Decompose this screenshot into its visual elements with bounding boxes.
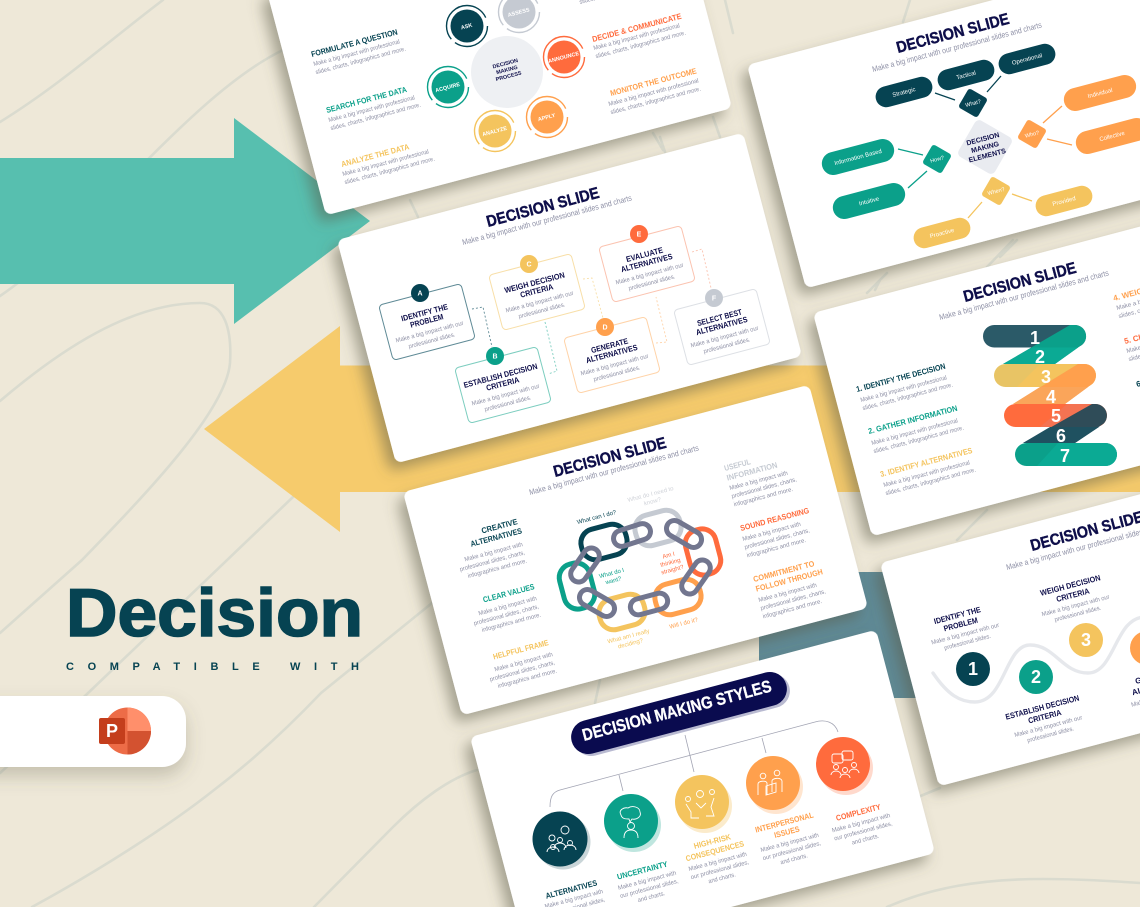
text: decide and communicate: Make a big impact with professional xyxy=(593,22,681,52)
diamond: what: What? xyxy=(965,99,982,109)
icon: PowerPoint logo: P xyxy=(106,721,118,741)
pill: information based xyxy=(819,136,897,178)
text: commitment to follow through: Make a big impact with xyxy=(758,582,818,604)
text: helpful frame xyxy=(487,638,558,691)
chain labels: What am I really xyxy=(607,629,650,645)
text: weigh decision criteria xyxy=(1035,572,1113,626)
diamond: decision making elements: DECISION xyxy=(966,132,1000,147)
text: interpersonal issues: ISSUES xyxy=(773,824,801,840)
icon circle: complexity xyxy=(816,737,873,795)
text: gather information: slides, charts, infographics and more. xyxy=(873,425,965,455)
node: assess: ASSESS xyxy=(507,7,531,19)
panel: decision making process slide xyxy=(267,0,732,215)
node: acquire xyxy=(428,66,468,108)
title: DECISION SLIDE xyxy=(552,435,668,481)
text: formulate a question: FORMULATE A QUESTION xyxy=(310,27,399,59)
box C: weigh decision criteria: WEIGH DECISION xyxy=(503,270,566,295)
text: identify the problem: professional slides. xyxy=(943,633,992,652)
text: sound reasoning: professional slides, charts, xyxy=(744,527,811,551)
text: identify the decision: 1. IDENTIFY THE DECISION xyxy=(855,362,947,394)
text: interpersonal issues: Make a big impact with xyxy=(760,832,820,854)
subtitle: Make a big impact with our professional slides and charts xyxy=(528,444,700,497)
diamond: decision making elements: ELEMENTS xyxy=(968,148,1007,164)
box B: establish decision criteria xyxy=(455,347,551,423)
text: weigh decision criteria: Make a big impact with our xyxy=(1041,594,1110,618)
badge F: F xyxy=(712,296,717,302)
center circle: PROCESS xyxy=(495,70,523,83)
box F: select best alternatives: SELECT BEST xyxy=(696,308,743,328)
text: interpersonal issues: INTERPERSONAL xyxy=(754,811,815,835)
connectors xyxy=(898,76,1072,218)
arrow: teal pointing right xyxy=(0,118,370,324)
zigzag numbered stack: 3 xyxy=(1041,367,1051,387)
text: generate alternatives xyxy=(1125,663,1140,709)
zigzag numbered stack: 5 xyxy=(1051,406,1061,426)
text: clear values: Make a big impact with xyxy=(478,595,538,617)
pill: operational: Operational xyxy=(1011,53,1043,67)
icon circle: uncertainty xyxy=(604,794,661,852)
text: complexity: our professional slides, xyxy=(833,820,893,842)
text: uncertainty: and charts. xyxy=(637,890,666,904)
text: identify the decision: slides, charts, infographics and more. xyxy=(862,382,954,412)
box F: select best alternatives: professional slides. xyxy=(703,336,751,355)
diamond: how: How? xyxy=(930,155,945,165)
text: useful information: professional slides, charts, xyxy=(731,476,798,500)
node: ask xyxy=(446,6,488,46)
text: complexity xyxy=(828,800,896,851)
step 4 xyxy=(1130,631,1140,665)
badge B xyxy=(486,347,504,365)
title pill: DECISION MAKING STYLES xyxy=(580,677,774,745)
center circle: DECISION xyxy=(492,58,519,70)
box E: evaluate alternatives: EVALUATE xyxy=(625,245,665,264)
text: clear values: infographics and more. xyxy=(481,612,542,634)
text: clear values xyxy=(471,582,542,635)
text: creative alternatives: infographics and more. xyxy=(467,558,528,580)
text: alternatives: ALTERNATIVES xyxy=(545,878,599,901)
step 1 xyxy=(956,652,990,686)
text: formulate a question: slides, charts, infographics and more. xyxy=(315,46,407,76)
panel: numbered list slide xyxy=(813,206,1140,536)
text: clear values: professional slides, charts, xyxy=(473,603,540,627)
pill: information based: Information Based xyxy=(834,149,883,167)
text: useful information xyxy=(723,451,800,508)
box C: weigh decision criteria: Make a big impact with our xyxy=(505,290,574,314)
chain labels: Will I do it? xyxy=(669,617,699,631)
text: choose xyxy=(1123,322,1140,363)
text: weigh decision criteria: professional slides. xyxy=(1054,605,1102,624)
text: commitment to follow through xyxy=(752,558,829,620)
pill: proactive: Proactive xyxy=(929,228,956,240)
node: analyze xyxy=(474,110,516,152)
diamond: when yellow: When? xyxy=(987,187,1005,197)
zigzag numbered stack xyxy=(983,325,1117,466)
box F: select best alternatives: Make a big impact with our xyxy=(690,325,759,349)
text: high-risk consequences: our professional slides, xyxy=(690,859,750,881)
diamond: when yellow xyxy=(981,176,1011,206)
text: search for the data: SEARCH FOR THE DATA xyxy=(325,85,408,115)
text: sound reasoning xyxy=(739,506,813,559)
box A: identify the problem: PROBLEM xyxy=(409,312,445,330)
text: sound reasoning: Make a big impact with xyxy=(742,521,802,543)
pill: tactical xyxy=(935,57,997,93)
text: weigh decision criteria: CRITERIA xyxy=(1055,587,1091,604)
box B: establish decision criteria: Make a big impact with our xyxy=(471,383,540,407)
arrow: yellow pointing left xyxy=(204,326,1140,532)
text: complexity: COMPLEXITY xyxy=(835,802,882,823)
step 2 xyxy=(1019,660,1053,694)
text: helpful frame: Make a big impact with xyxy=(494,651,554,673)
text: commitment to follow through: professional slides, charts, xyxy=(760,588,827,612)
text: interpersonal issues: our professional slides, xyxy=(762,840,822,862)
pill: provided xyxy=(1033,183,1095,219)
box D: generate alternatives: ALTERNATIVES xyxy=(585,343,639,365)
band: muted teal arrow body xyxy=(759,572,1140,698)
title: DECISION SLIDE xyxy=(485,185,601,231)
pill: individual: Individual xyxy=(1087,88,1113,100)
center circle: MAKING xyxy=(496,65,518,76)
diamond: how xyxy=(922,144,952,174)
pill: operational xyxy=(996,41,1058,77)
icon circle: high-risk consequences xyxy=(675,775,732,833)
text: identify alternatives: slides, charts, infographics and more. xyxy=(885,467,977,497)
text: identify the decision xyxy=(855,362,954,412)
text: analyze the data: ANALYZE THE DATA xyxy=(340,142,410,169)
text: uncertainty xyxy=(614,858,682,907)
badge A xyxy=(411,284,429,302)
title: DECISION SLIDE xyxy=(895,11,1011,57)
text: helpful frame: infographics and more. xyxy=(497,668,558,690)
badge D: D xyxy=(602,324,608,332)
text: high-risk consequences: HIGH-RISK xyxy=(693,832,732,851)
box E: evaluate alternatives: ALTERNATIVES xyxy=(620,252,674,274)
text: creative alternatives xyxy=(457,517,528,581)
chain labels: know? xyxy=(644,497,662,507)
box A: identify the problem: Make a big impact with our xyxy=(395,320,464,344)
text: gather information: Make a big impact with professional xyxy=(871,417,959,447)
text: weigh decision criteria: WEIGH DECISION xyxy=(1039,573,1102,598)
badge C xyxy=(520,255,538,273)
title: DECISION SLIDE xyxy=(962,260,1078,306)
node: ask: ASK xyxy=(460,23,473,31)
box B: establish decision criteria: ESTABLISH DECISION xyxy=(463,362,539,390)
text: uncertainty: Make a big impact with xyxy=(617,870,678,892)
badge B: B xyxy=(492,354,498,360)
chain labels: What do I need to xyxy=(627,486,675,504)
diamond: decision making elements: MAKING xyxy=(971,141,1000,155)
pill: strategic xyxy=(873,74,935,110)
text: identify alternatives: Make a big impact with professional xyxy=(883,459,971,489)
text: analyze the data: Make a big impact with professional xyxy=(342,148,430,178)
text: interpersonal issues xyxy=(754,810,824,870)
pill: strategic: Strategic xyxy=(892,87,916,99)
chain diagram xyxy=(556,507,724,633)
text: decide and communicate xyxy=(591,12,687,60)
zigzag numbered stack: 7 xyxy=(1060,446,1070,466)
step 2: 2 xyxy=(1031,667,1041,687)
text: gather information xyxy=(867,404,965,455)
text: identify the problem: Make a big impact with our xyxy=(931,622,1000,646)
text: uncertainty: UNCERTAINTY xyxy=(616,859,669,882)
subtitle: Make a big impact with our professional slides and charts xyxy=(461,194,633,247)
text: high-risk consequences xyxy=(682,829,753,889)
text: search for the data: Make a big impact with professional xyxy=(328,94,416,124)
box C: weigh decision criteria: professional slides. xyxy=(518,301,566,320)
text: high-risk consequences: CONSEQUENCES xyxy=(685,839,746,863)
panel: decision elements slide xyxy=(747,0,1140,288)
diamond: decision making elements xyxy=(956,118,1014,176)
tree connector xyxy=(550,721,838,807)
text: establish decision criteria: ESTABLISH DECISION xyxy=(1004,693,1080,722)
text: interpersonal issues: and charts. xyxy=(780,852,809,866)
text: monitor the outcome: Make a big impact with professional xyxy=(608,77,699,108)
pill: intuitive: Intuitive xyxy=(858,196,881,208)
text: creative alternatives: CREATIVE xyxy=(480,517,519,535)
panel: decision flow boxes slide xyxy=(337,133,802,463)
chain labels: thinking xyxy=(660,558,681,569)
text: uncertainty: our professional slides, xyxy=(619,878,679,900)
center circle xyxy=(471,36,543,108)
node: apply: APPLY xyxy=(537,113,556,123)
node: apply xyxy=(526,96,568,138)
box C: weigh decision criteria xyxy=(489,254,585,330)
chain labels: deciding? xyxy=(617,638,644,650)
text: identify the problem: PROBLEM xyxy=(943,616,979,633)
box B: establish decision criteria: professional slides. xyxy=(484,394,532,413)
pill: individual xyxy=(1061,72,1139,114)
text: identify the problem xyxy=(925,602,1002,655)
text: creative alternatives: ALTERNATIVES xyxy=(469,526,524,549)
box A: identify the problem: IDENTIFY THE xyxy=(400,302,449,323)
badge C: C xyxy=(526,262,532,268)
text: analyze the data: slides, charts, infographics and more. xyxy=(344,156,436,186)
zigzag numbered stack: 4 xyxy=(1046,387,1056,407)
text: helpful frame: HELPFUL FRAME xyxy=(492,638,550,661)
text: creative alternatives: Make a big impact with xyxy=(464,541,524,563)
text: establish decision criteria xyxy=(1004,693,1087,748)
chain labels: Am I xyxy=(662,551,676,561)
node: announce: ANNOUNCE xyxy=(548,51,580,65)
text: gather information: 2. GATHER INFORMATION xyxy=(867,404,959,436)
text: monitor the outcome xyxy=(608,66,702,116)
text: high-risk consequences: Make a big impact with xyxy=(688,851,748,873)
chain labels: What do I xyxy=(599,568,625,580)
text: complexity: and charts. xyxy=(851,833,880,847)
diamond: when orange: Who? xyxy=(1025,130,1040,140)
subtitle: Make a big impact with our professional slides and charts xyxy=(938,269,1110,322)
text: useful information: USEFUL xyxy=(723,457,752,473)
node: assess xyxy=(498,0,540,32)
text: search for the data: slides, charts, infographics and more. xyxy=(330,102,422,132)
pill: collective xyxy=(1073,115,1140,157)
box D: generate alternatives: Make a big impact with our xyxy=(580,353,649,377)
panel: decision making styles slide xyxy=(470,630,935,907)
chain labels: What can I do? xyxy=(576,510,618,526)
subtitle: Make a big impact with our professional slides and charts xyxy=(871,21,1043,74)
diamond: when orange xyxy=(1017,119,1047,149)
box B: establish decision criteria: CRITERIA xyxy=(485,375,521,393)
badge F xyxy=(705,289,723,307)
text: formulate a question: Make a big impact with professional xyxy=(313,38,401,68)
step 3: 3 xyxy=(1081,630,1091,650)
panel: steps wave slide xyxy=(880,456,1140,786)
text: identify the decision: Make a big impact with professional xyxy=(860,374,948,404)
badge E xyxy=(630,225,648,243)
text: sound reasoning: infographics and more. xyxy=(746,537,807,559)
chain labels xyxy=(576,486,699,653)
pill: collective: Collective xyxy=(1099,131,1126,143)
text: establish decision criteria: Make a big impact with our xyxy=(1014,714,1083,739)
node: announce xyxy=(544,36,584,78)
box D: generate alternatives: professional slides. xyxy=(593,364,641,383)
pill: proactive xyxy=(911,215,973,251)
text: monitor the outcome: MONITOR THE OUTCOME xyxy=(609,66,698,98)
text: weigh evidence xyxy=(1112,274,1140,320)
chain labels: want? xyxy=(604,576,623,586)
zigzag numbered stack: 6 xyxy=(1056,426,1066,446)
diamond: what xyxy=(958,88,988,118)
text: monitor the outcome: slides, charts, infographics and more. xyxy=(610,86,702,116)
text: useful information: infographics and more. xyxy=(733,486,794,508)
box E: evaluate alternatives xyxy=(599,226,695,302)
text: useful information: Make a big impact with xyxy=(729,470,789,492)
node: analyze: ANALYZE xyxy=(482,126,508,138)
box C: weigh decision criteria: CRITERIA xyxy=(519,282,555,300)
step 3 xyxy=(1069,623,1103,657)
text: creative alternatives: professional slides, charts, xyxy=(459,549,526,573)
zigzag numbered stack: 1 xyxy=(1030,328,1040,348)
box D: generate alternatives: GENERATE xyxy=(590,336,630,355)
node: acquire: ACQUIRE xyxy=(435,82,461,94)
icon circle: interpersonal issues xyxy=(746,756,803,814)
text: useful information: INFORMATION xyxy=(726,461,779,483)
zigzag numbered stack: 2 xyxy=(1035,347,1045,367)
text: compatible with: COMPATIBLE WITH xyxy=(66,661,359,673)
text: sound reasoning: SOUND REASONING xyxy=(739,506,810,533)
text: clear values: CLEAR VALUES xyxy=(482,582,536,604)
text: formulate a question xyxy=(310,27,407,76)
text: identify the problem: IDENTIFY THE xyxy=(933,605,982,626)
text: commitment to follow through: FOLLOW THROUGH xyxy=(755,567,824,594)
badge: PowerPoint xyxy=(0,696,186,767)
badge D xyxy=(596,318,614,336)
text: establish decision criteria: CRITERIA xyxy=(1027,708,1063,725)
box D: generate alternatives xyxy=(564,317,660,393)
box E: evaluate alternatives: Make a big impact with our xyxy=(615,262,684,286)
text: search for the data xyxy=(325,85,422,132)
pill: provided: Provided xyxy=(1052,196,1076,208)
text: high-risk consequences: and charts. xyxy=(708,871,737,885)
pill: tactical: Tactical xyxy=(956,71,977,81)
box F: select best alternatives: ALTERNATIVES xyxy=(695,315,749,337)
text: commitment to follow through: COMMITMENT TO xyxy=(752,559,815,584)
dashed connectors xyxy=(472,249,711,374)
icon circle: alternatives xyxy=(532,812,590,870)
heading: Decision: Decision xyxy=(66,575,363,651)
text: establish decision criteria: professional slides. xyxy=(1027,725,1075,744)
box E: evaluate alternatives: professional slides. xyxy=(628,273,676,292)
chain labels: straight? xyxy=(661,565,685,576)
text: helpful frame: professional slides, charts, xyxy=(489,659,556,683)
wave line xyxy=(933,617,1140,702)
text: decide and communicate: DECIDE & COMMUNICATE xyxy=(591,12,683,44)
text: identify alternatives xyxy=(879,446,977,497)
step 1: 1 xyxy=(968,659,978,679)
icon: PowerPoint logo xyxy=(99,708,151,754)
box A: identify the problem xyxy=(379,284,475,360)
badge A: A xyxy=(417,290,423,298)
text: commitment to follow through: infographics and more. xyxy=(762,598,823,620)
text: decide and communicate: slides, charts, infographics and more. xyxy=(595,30,687,60)
pill: intuitive xyxy=(830,180,908,222)
box F: select best alternatives xyxy=(674,289,770,365)
text: complexity: Make a big impact with xyxy=(831,812,892,834)
badge E: E xyxy=(637,232,642,238)
text: identify alternatives: 3. IDENTIFY ALTERNATIVES xyxy=(879,446,974,479)
panel: chain slide xyxy=(403,385,868,715)
box A: identify the problem: professional slides. xyxy=(408,331,456,350)
